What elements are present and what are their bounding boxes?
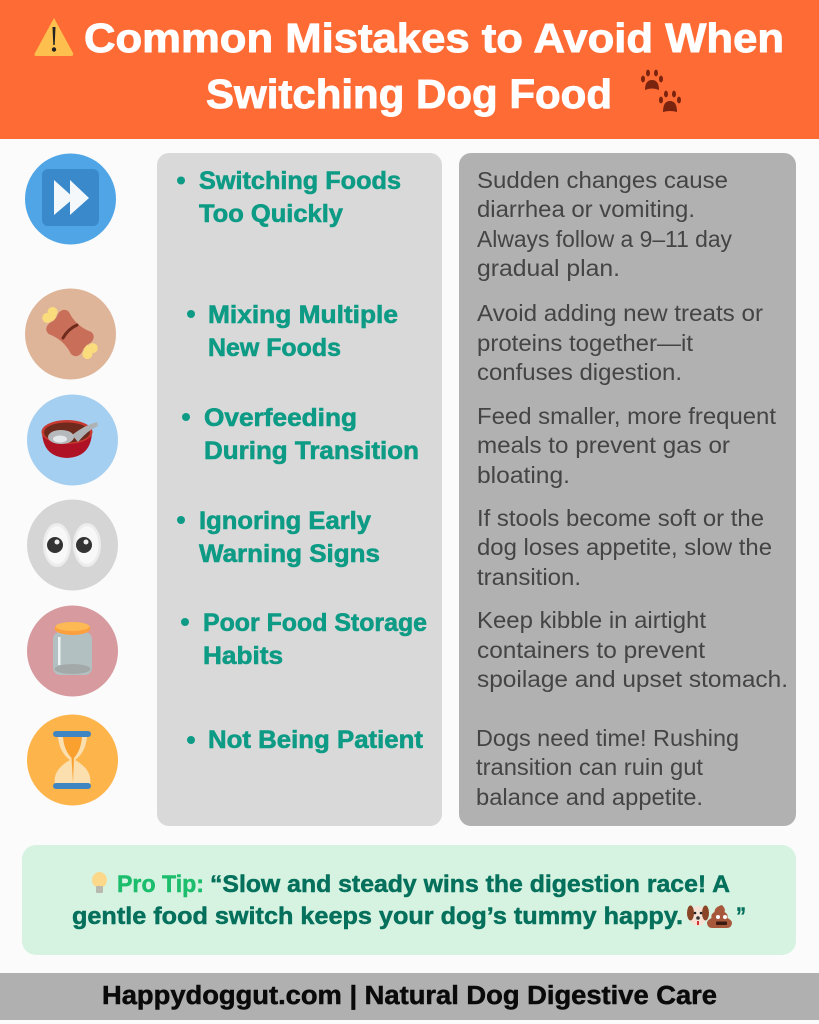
explanation 3: bloating.: [477, 462, 570, 488]
explanation 1: Sudden changes cause: [477, 167, 728, 193]
icon: bowl and spoon: [27, 394, 118, 486]
explanation 4: [477, 505, 772, 590]
title: Common Mistakes to Avoid When: [84, 15, 784, 61]
explanation 2: proteins together—it: [477, 330, 693, 356]
panel: mistakes: [157, 153, 442, 826]
icon: poo: [707, 905, 732, 928]
explanation 1: [477, 167, 732, 281]
icon: jar: [27, 606, 118, 696]
icon: fast forward: [25, 154, 116, 244]
explanation 6: balance and appetite.: [476, 784, 703, 810]
mistake 5: Poor Food Storage: [203, 609, 427, 637]
mistake 4: Ignoring Early: [199, 507, 371, 535]
title: [84, 15, 784, 117]
mistake 5: [181, 609, 427, 670]
mistake 2: New Foods: [208, 334, 341, 362]
mistake 1: [177, 167, 401, 228]
header banner: [0, 0, 819, 139]
mistake 2: [187, 301, 398, 362]
mistake 5: Habits: [203, 642, 283, 670]
explanation 6: transition can ruin gut: [476, 754, 703, 780]
mistake 1: Too Quickly: [199, 200, 343, 228]
explanation 5: spoilage and upset stomach.: [477, 666, 788, 692]
mistake 4: Warning Signs: [199, 540, 380, 568]
explanation 5: Keep kibble in airtight: [477, 607, 706, 633]
mistake 3: During Transition: [204, 437, 419, 465]
mistake 3: Overfeeding: [204, 404, 357, 432]
explanation 4: dog loses appetite, slow the: [477, 534, 772, 560]
mistake 3: [182, 404, 419, 465]
callout: pro tip: gentle food switch keeps your dog’s tummy happy.: [72, 903, 683, 930]
explanation 2: confuses digestion.: [477, 359, 682, 385]
icon: paw prints: [641, 70, 681, 112]
explanation 2: [477, 300, 763, 385]
mistake 2: Mixing Multiple: [208, 301, 398, 329]
footer: Happydoggut.com | Natural Dog Digestive Care: [102, 982, 717, 1010]
explanation 6: [476, 725, 739, 810]
explanation 4: transition.: [477, 564, 581, 590]
callout: pro tip: ”: [736, 903, 746, 930]
footer: [0, 973, 819, 1020]
explanation 6: Dogs need time! Rushing: [476, 725, 739, 751]
callout: pro tip: “Slow and steady wins the digestion race! A: [210, 871, 730, 898]
panel: explanations: [459, 153, 796, 826]
explanation 5: containers to prevent: [477, 637, 705, 663]
explanation 5: [477, 607, 788, 692]
icon: warning: [34, 18, 73, 56]
mistake 4: [177, 507, 380, 568]
title: Switching Dog Food: [206, 71, 612, 117]
icon: light bulb: [92, 872, 107, 893]
icon: dog face: [687, 906, 709, 926]
explanation 2: Avoid adding new treats or: [477, 300, 763, 326]
mistake 6: Not Being Patient: [208, 726, 424, 754]
icon: meat on bone: [25, 288, 116, 380]
icon: eyes: [27, 500, 118, 590]
mistake 1: Switching Foods: [199, 167, 401, 195]
explanation 4: If stools become soft or the: [477, 505, 764, 531]
callout: pro tip: [22, 845, 796, 955]
explanation 3: Feed smaller, more frequent: [477, 403, 776, 429]
explanation 1: gradual plan.: [477, 255, 620, 281]
callout: pro tip: Pro Tip:: [117, 871, 204, 898]
icon: hourglass: [27, 714, 118, 806]
explanation 1: Always follow a 9–11 day: [477, 226, 732, 252]
explanation 1: diarrhea or vomiting.: [477, 196, 695, 222]
explanation 3: meals to prevent gas or: [477, 432, 730, 458]
explanation 3: [477, 403, 776, 488]
